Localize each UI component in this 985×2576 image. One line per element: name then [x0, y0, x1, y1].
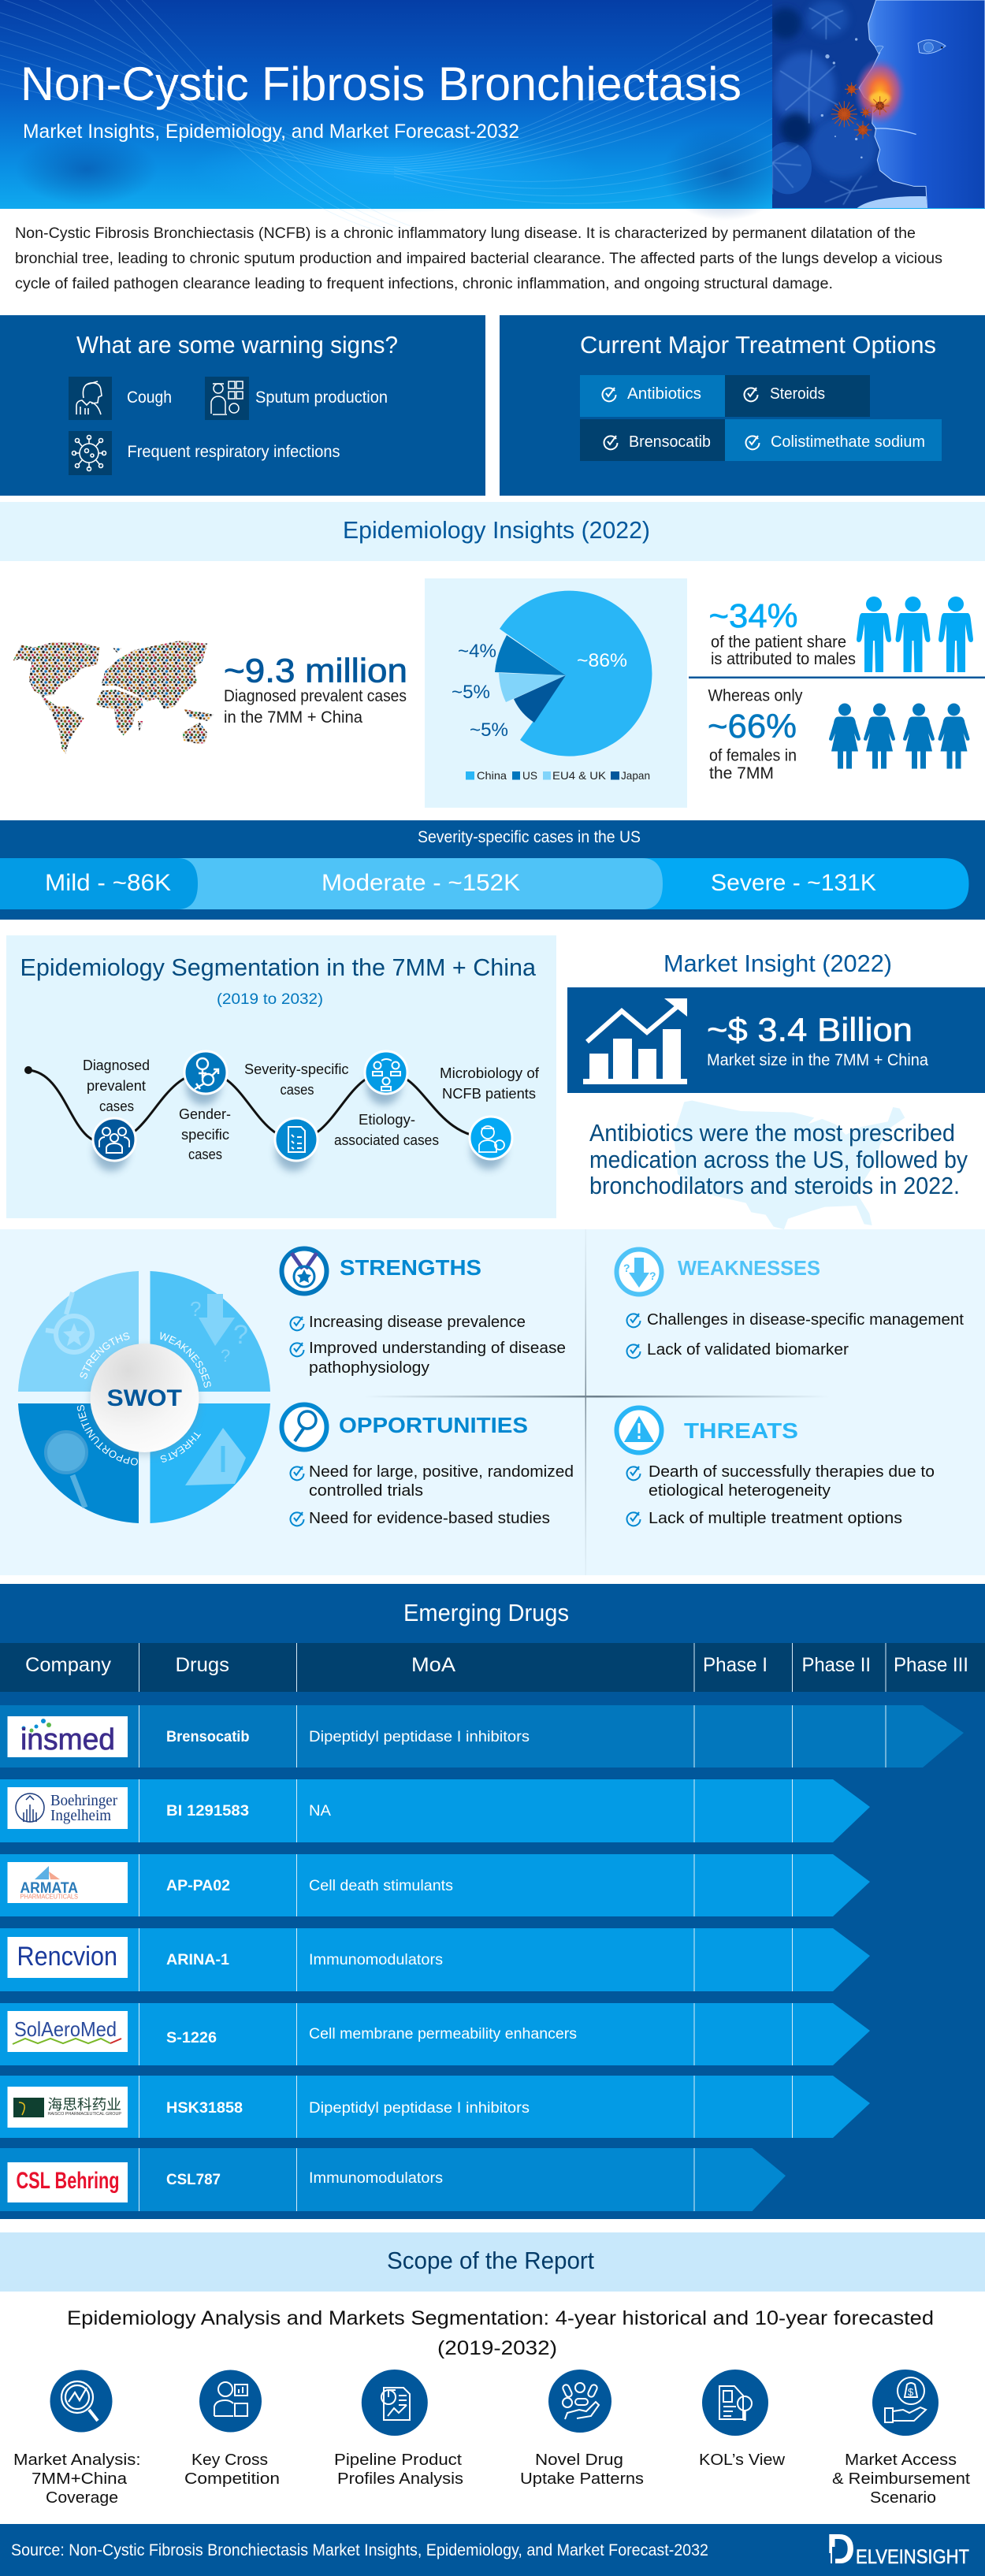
label: diagnosed prevalent cases: Diagnosed [83, 1058, 150, 1073]
segment: moderate [158, 858, 663, 909]
SWOT wheel: ? [221, 1346, 230, 1366]
intro text: cycle of failed pathogen clearance leading to frequent infections, chronic inflammation, and ongoing structural damage. [15, 275, 833, 292]
block: strengths [282, 1248, 566, 1377]
subheading: years: (2019 to 2032) [217, 991, 323, 1008]
stat: females: Whereas only [708, 687, 803, 704]
heading band: epidemiology insights [0, 502, 985, 561]
icon: down arrow: ? [649, 1269, 656, 1282]
option: antibiotics [580, 375, 725, 417]
panel: treatment options [500, 315, 985, 496]
world map of people [13, 641, 214, 754]
scope item: market access: Market Access [845, 2451, 957, 2469]
table header: Drugs [175, 1654, 229, 1676]
row: CSL787: Immunomodulators [309, 2170, 443, 2187]
row: ARINA-1: ARINA-1 [166, 1952, 229, 1968]
block: opportunities: Need for large, positive, randomized [309, 1463, 574, 1481]
label: etiology-associated cases: Etiology- [359, 1112, 415, 1128]
block: weaknesses [616, 1250, 964, 1359]
scope item: market access: & Reimbursement [832, 2470, 970, 2488]
row: Brensocatib: Brensocatib [166, 1729, 249, 1745]
label: etiology-associated cases: associated cases [334, 1132, 439, 1148]
logo: Boehringer Ingelheim: Ingelheim [50, 1807, 111, 1824]
intro text: bronchial tree, leading to chronic sputum production and impaired bacterial clearance. The affected parts of the lungs develop a vicious [15, 250, 942, 267]
SWOT hub: SWOT [107, 1385, 182, 1411]
row: HSK31858 [0, 2076, 870, 2138]
scope item: market access: $ [908, 2386, 914, 2398]
node: severity-specific cases [275, 1118, 318, 1171]
label: gender-specific cases [179, 1106, 231, 1162]
label: gender-specific cases: Gender- [179, 1106, 231, 1122]
block: opportunities: controlled trials [309, 1482, 423, 1500]
panel: market size [567, 987, 985, 1093]
row: AP-PA02: Cell death stimulants [309, 1878, 453, 1894]
SWOT wheel: THREATS [161, 1433, 201, 1463]
stat: 9.3 million: Diagnosed prevalent cases [224, 687, 407, 705]
node: microbiology [470, 1117, 512, 1169]
node: diagnosed prevalent cases [93, 1118, 136, 1171]
icon: sputum production [205, 377, 249, 420]
block: threats: Dearth of successfully therapies due to [649, 1463, 935, 1481]
heading band: scope of the report [0, 2232, 985, 2292]
intro text [15, 225, 942, 292]
US map background [674, 1101, 905, 1229]
label: diagnosed prevalent cases: cases [99, 1098, 134, 1114]
wave connector [24, 1066, 491, 1142]
label: severity-specific cases: Severity-specific [244, 1061, 348, 1077]
subtitle: Market Insights, Epidemiology, and Market Forecast-2032 [23, 121, 519, 143]
SWOT wheel: STRENGTHS [80, 1333, 129, 1379]
legend [466, 769, 650, 782]
panel: market size: ~$ 3.4 Billion [707, 1011, 913, 1048]
pie chart: ~5% [452, 682, 490, 703]
heading band: scope of the report: Scope of the Report [387, 2247, 594, 2274]
block: opportunities [282, 1404, 574, 1527]
stat: females [708, 687, 803, 782]
option: steroids: Steroids [770, 385, 825, 403]
scope item: KOL's view: KOL’s View [699, 2451, 786, 2469]
row: Brensocatib: Dipeptidyl peptidase I inhibitors [309, 1729, 530, 1745]
block: weaknesses: Challenges in disease-specific management [647, 1311, 964, 1329]
scope item: key cross competition [184, 2370, 280, 2488]
logo: Renovion: Rencvion [17, 1942, 117, 1972]
icon: growth chart [583, 998, 687, 1084]
SWOT wheel: OPPORTUNITIES [77, 1405, 138, 1466]
heading: epidemiology segmentation: Epidemiology Segmentation in the 7MM + China [20, 953, 537, 981]
text: antibiotics statement: bronchodilators and steroids in 2022. [589, 1172, 960, 1199]
SWOT wheel: ? [233, 1320, 248, 1350]
scope item: novel drug uptake: Novel Drug [535, 2451, 623, 2469]
block: weaknesses: WEAKNESSES [678, 1256, 820, 1280]
logo: Haisco: 海思科药业 [47, 2097, 121, 2113]
SWOT wheel: WEAKNESSES [161, 1332, 211, 1388]
legend: China [477, 769, 507, 782]
scope item: KOL's view [699, 2370, 786, 2469]
table header [0, 1643, 985, 1692]
row: AP-PA02 [0, 1854, 870, 1916]
label: gender-specific cases: cases [188, 1147, 222, 1162]
label: severity-specific cases: cases [281, 1082, 314, 1098]
scope item: market access: Scenario [870, 2489, 936, 2507]
pie chart panel [425, 578, 687, 808]
pie chart: ~4% [458, 641, 496, 662]
logo: Boehringer Ingelheim: Boehringer [50, 1792, 117, 1809]
logo: Insmed [8, 1716, 128, 1757]
text: scope statement [67, 2307, 934, 2359]
scope item: pipeline product profiles: Profiles Analysis [337, 2470, 463, 2488]
logo: Armata [8, 1862, 128, 1903]
block: strengths: Increasing disease prevalence [309, 1314, 526, 1331]
scope item: market analysis: Market Analysis: [13, 2451, 140, 2469]
header banner [0, 0, 985, 229]
heading: market insight: Market Insight (2022) [663, 950, 892, 977]
stat: males: is attributed to males [711, 650, 856, 668]
icon: down arrow [616, 1250, 662, 1294]
icon: magnifier [282, 1404, 326, 1450]
label: respiratory infections: Frequent respiratory infections [128, 443, 340, 461]
scope item: novel drug uptake: Uptake Patterns [520, 2470, 644, 2488]
label: microbiology [440, 1065, 540, 1102]
segment: severe: Severe - ~131K [711, 870, 876, 896]
scope item: pipeline product profiles: Pipeline Product [334, 2451, 462, 2469]
logo: Insmed: insmed [20, 1723, 115, 1756]
scope item: market analysis: Coverage [46, 2489, 118, 2507]
label: microbiology: NCFB patients [442, 1086, 536, 1102]
block: opportunities: OPPORTUNITIES [339, 1413, 528, 1437]
panel: epidemiology segmentation [6, 935, 556, 1218]
logo: SolAeroMed: SolAeroMed [14, 2017, 117, 2041]
row: S-1226 [0, 2003, 870, 2065]
row: BI 1291583: NA [309, 1803, 331, 1820]
stat: 9.3 million: ~9.3 million [224, 652, 407, 690]
icon: medal [282, 1248, 326, 1294]
row: S-1226: Cell membrane permeability enhancers [309, 2026, 577, 2043]
panel: emerging drugs [0, 1584, 985, 2219]
icon: warning triangle [616, 1407, 662, 1453]
segment: moderate: Moderate - ~152K [322, 870, 520, 896]
table header: Phase II [802, 1654, 871, 1676]
source text: Source: Non-Cystic Fibrosis Bronchiectasis Market Insights, Epidemiology, and Market Forecast-2032 [11, 2541, 708, 2559]
panel: severity-specific cases [0, 820, 985, 920]
logo: CSL Behring [8, 2162, 128, 2202]
logo: Boehringer Ingelheim [8, 1787, 128, 1829]
heading band: epidemiology insights: Epidemiology Insights (2022) [343, 516, 650, 544]
stat: females: ~66% [708, 708, 797, 745]
row: ARINA-1: Immunomodulators [309, 1952, 443, 1968]
face illustration [764, 0, 985, 210]
SWOT hub [90, 1344, 199, 1455]
row: CSL787 [0, 2148, 786, 2211]
icon: down arrow: ? [623, 1262, 630, 1274]
icons: female figures [829, 703, 969, 769]
row: HSK31858: Dipeptidyl peptidase I inhibitors [309, 2100, 530, 2117]
option: steroids [725, 375, 870, 417]
row: HSK31858: HSK31858 [166, 2100, 243, 2117]
node: gender-specific cases [184, 1051, 227, 1105]
table header: Company [25, 1654, 112, 1676]
scope item: market access [832, 2370, 970, 2507]
table header: Phase III [894, 1654, 968, 1676]
label: severity-specific cases [244, 1061, 348, 1098]
text: antibiotics statement [589, 1119, 968, 1199]
text: scope statement: Epidemiology Analysis and Markets Segmentation: 4-year historical and 10-year forecasted [67, 2307, 934, 2329]
footer [0, 2524, 985, 2576]
stat: males: ~34% [709, 597, 797, 635]
logo: Armata: PHARMACEUTICALS [20, 1893, 78, 1901]
row: CSL787: CSL787 [166, 2172, 221, 2188]
table header: Phase I [703, 1654, 768, 1676]
panel: SWOT [0, 1229, 985, 1575]
stat: 9.3 million [224, 652, 407, 727]
logo: Haisco: HAISCO PHARMACEUTICAL GROUP [47, 2112, 122, 2117]
intro text: Non-Cystic Fibrosis Bronchiectasis (NCFB) is a chronic inflammatory lung disease. It is characterized by permanent dilatation of the [15, 225, 916, 242]
segment: severe [615, 858, 969, 909]
option: colistimethate sodium: Colistimethate sodium [771, 433, 925, 451]
scope item: key cross competition: Key Cross [191, 2451, 268, 2469]
stat: 9.3 million: in the 7MM + China [224, 708, 362, 727]
block: weaknesses: Lack of validated biomarker [647, 1341, 849, 1359]
heading: emerging drugs: Emerging Drugs [403, 1599, 569, 1626]
label: diagnosed prevalent cases: prevalent [87, 1078, 146, 1094]
block: opportunities: Need for evidence-based studies [309, 1510, 550, 1527]
row: S-1226: S-1226 [166, 2030, 217, 2046]
icons: male figures [857, 597, 973, 672]
logo: Renovion [8, 1937, 128, 1978]
row: BI 1291583: BI 1291583 [166, 1803, 249, 1820]
logo: CSL Behring: CSL Behring [16, 2168, 120, 2194]
scope item: key cross competition: Competition [184, 2470, 280, 2488]
stat: females: the 7MM [709, 764, 774, 782]
stat: females: of females in [709, 747, 797, 764]
logo: DelveInsight: D [827, 2526, 855, 2573]
block: threats: etiological heterogeneity [649, 1482, 831, 1500]
pie chart [452, 591, 652, 756]
legend: Japan [621, 769, 650, 782]
row: AP-PA02: AP-PA02 [166, 1878, 230, 1894]
logo: SolAeroMed [8, 2011, 128, 2052]
pie chart: ~5% [470, 719, 508, 741]
option: brensocatib [580, 419, 725, 461]
block: threats [616, 1407, 935, 1527]
block: strengths: STRENGTHS [340, 1255, 481, 1280]
text: antibiotics statement: Antibiotics were the most prescribed [589, 1119, 955, 1147]
stat: males [709, 597, 856, 668]
icon: cough [69, 377, 112, 420]
segment: mild: Mild - ~86K [45, 870, 171, 896]
table header: MoA [411, 1654, 455, 1676]
label: cough: Cough [127, 388, 172, 407]
heading: warning signs: What are some warning signs? [76, 331, 398, 359]
scope item: market analysis: 7MM+China [32, 2470, 128, 2488]
logo: DelveInsight [827, 2526, 969, 2573]
block: strengths: pathophysiology [309, 1359, 429, 1377]
logo: Haisco [8, 2087, 128, 2128]
SWOT wheel: ? [190, 1297, 201, 1321]
title: Non-Cystic Fibrosis Bronchiectasis [20, 58, 742, 110]
scope item: novel drug uptake [520, 2370, 644, 2488]
row: ARINA-1 [0, 1928, 870, 1991]
text: scope statement: (2019-2032) [437, 2337, 557, 2359]
legend: US [522, 769, 537, 782]
label: etiology-associated cases [334, 1112, 439, 1148]
pie chart: ~86% [577, 650, 627, 671]
row: BI 1291583 [0, 1779, 870, 1842]
row: Brensocatib [0, 1705, 964, 1768]
panel: market size: Market size in the 7MM + China [707, 1051, 928, 1069]
block: threats: THREATS [684, 1418, 798, 1443]
label: microbiology: Microbiology of [440, 1065, 540, 1081]
option: brensocatib: Brensocatib [629, 433, 711, 451]
panel: warning signs [0, 315, 485, 496]
block: threats: Lack of multiple treatment options [649, 1510, 902, 1527]
heading: treatment options: Current Major Treatment Options [580, 331, 936, 359]
label: gender-specific cases: specific [181, 1127, 229, 1143]
block: strengths: Improved understanding of disease [309, 1340, 566, 1357]
logo: Armata: ARMATA [20, 1880, 78, 1897]
stat: males: of the patient share [711, 634, 846, 651]
SWOT wheel [18, 1271, 270, 1523]
label: sputum production: Sputum production [255, 388, 388, 407]
logo: DelveInsight: ELVEINSIGHT [856, 2546, 969, 2568]
segment: mild [0, 858, 198, 909]
node: etiology-associated cases [365, 1051, 407, 1105]
label: diagnosed prevalent cases [83, 1058, 150, 1114]
option: colistimethate sodium [725, 419, 942, 461]
scope item: market analysis [13, 2370, 140, 2507]
scope item: pipeline product profiles [334, 2370, 463, 2488]
legend: EU4 & UK [552, 769, 607, 782]
icon: respiratory infections [69, 431, 112, 475]
panel: severity-specific cases: Severity-specific cases in the US [418, 828, 641, 846]
option: antibiotics: Antibiotics [627, 385, 701, 403]
